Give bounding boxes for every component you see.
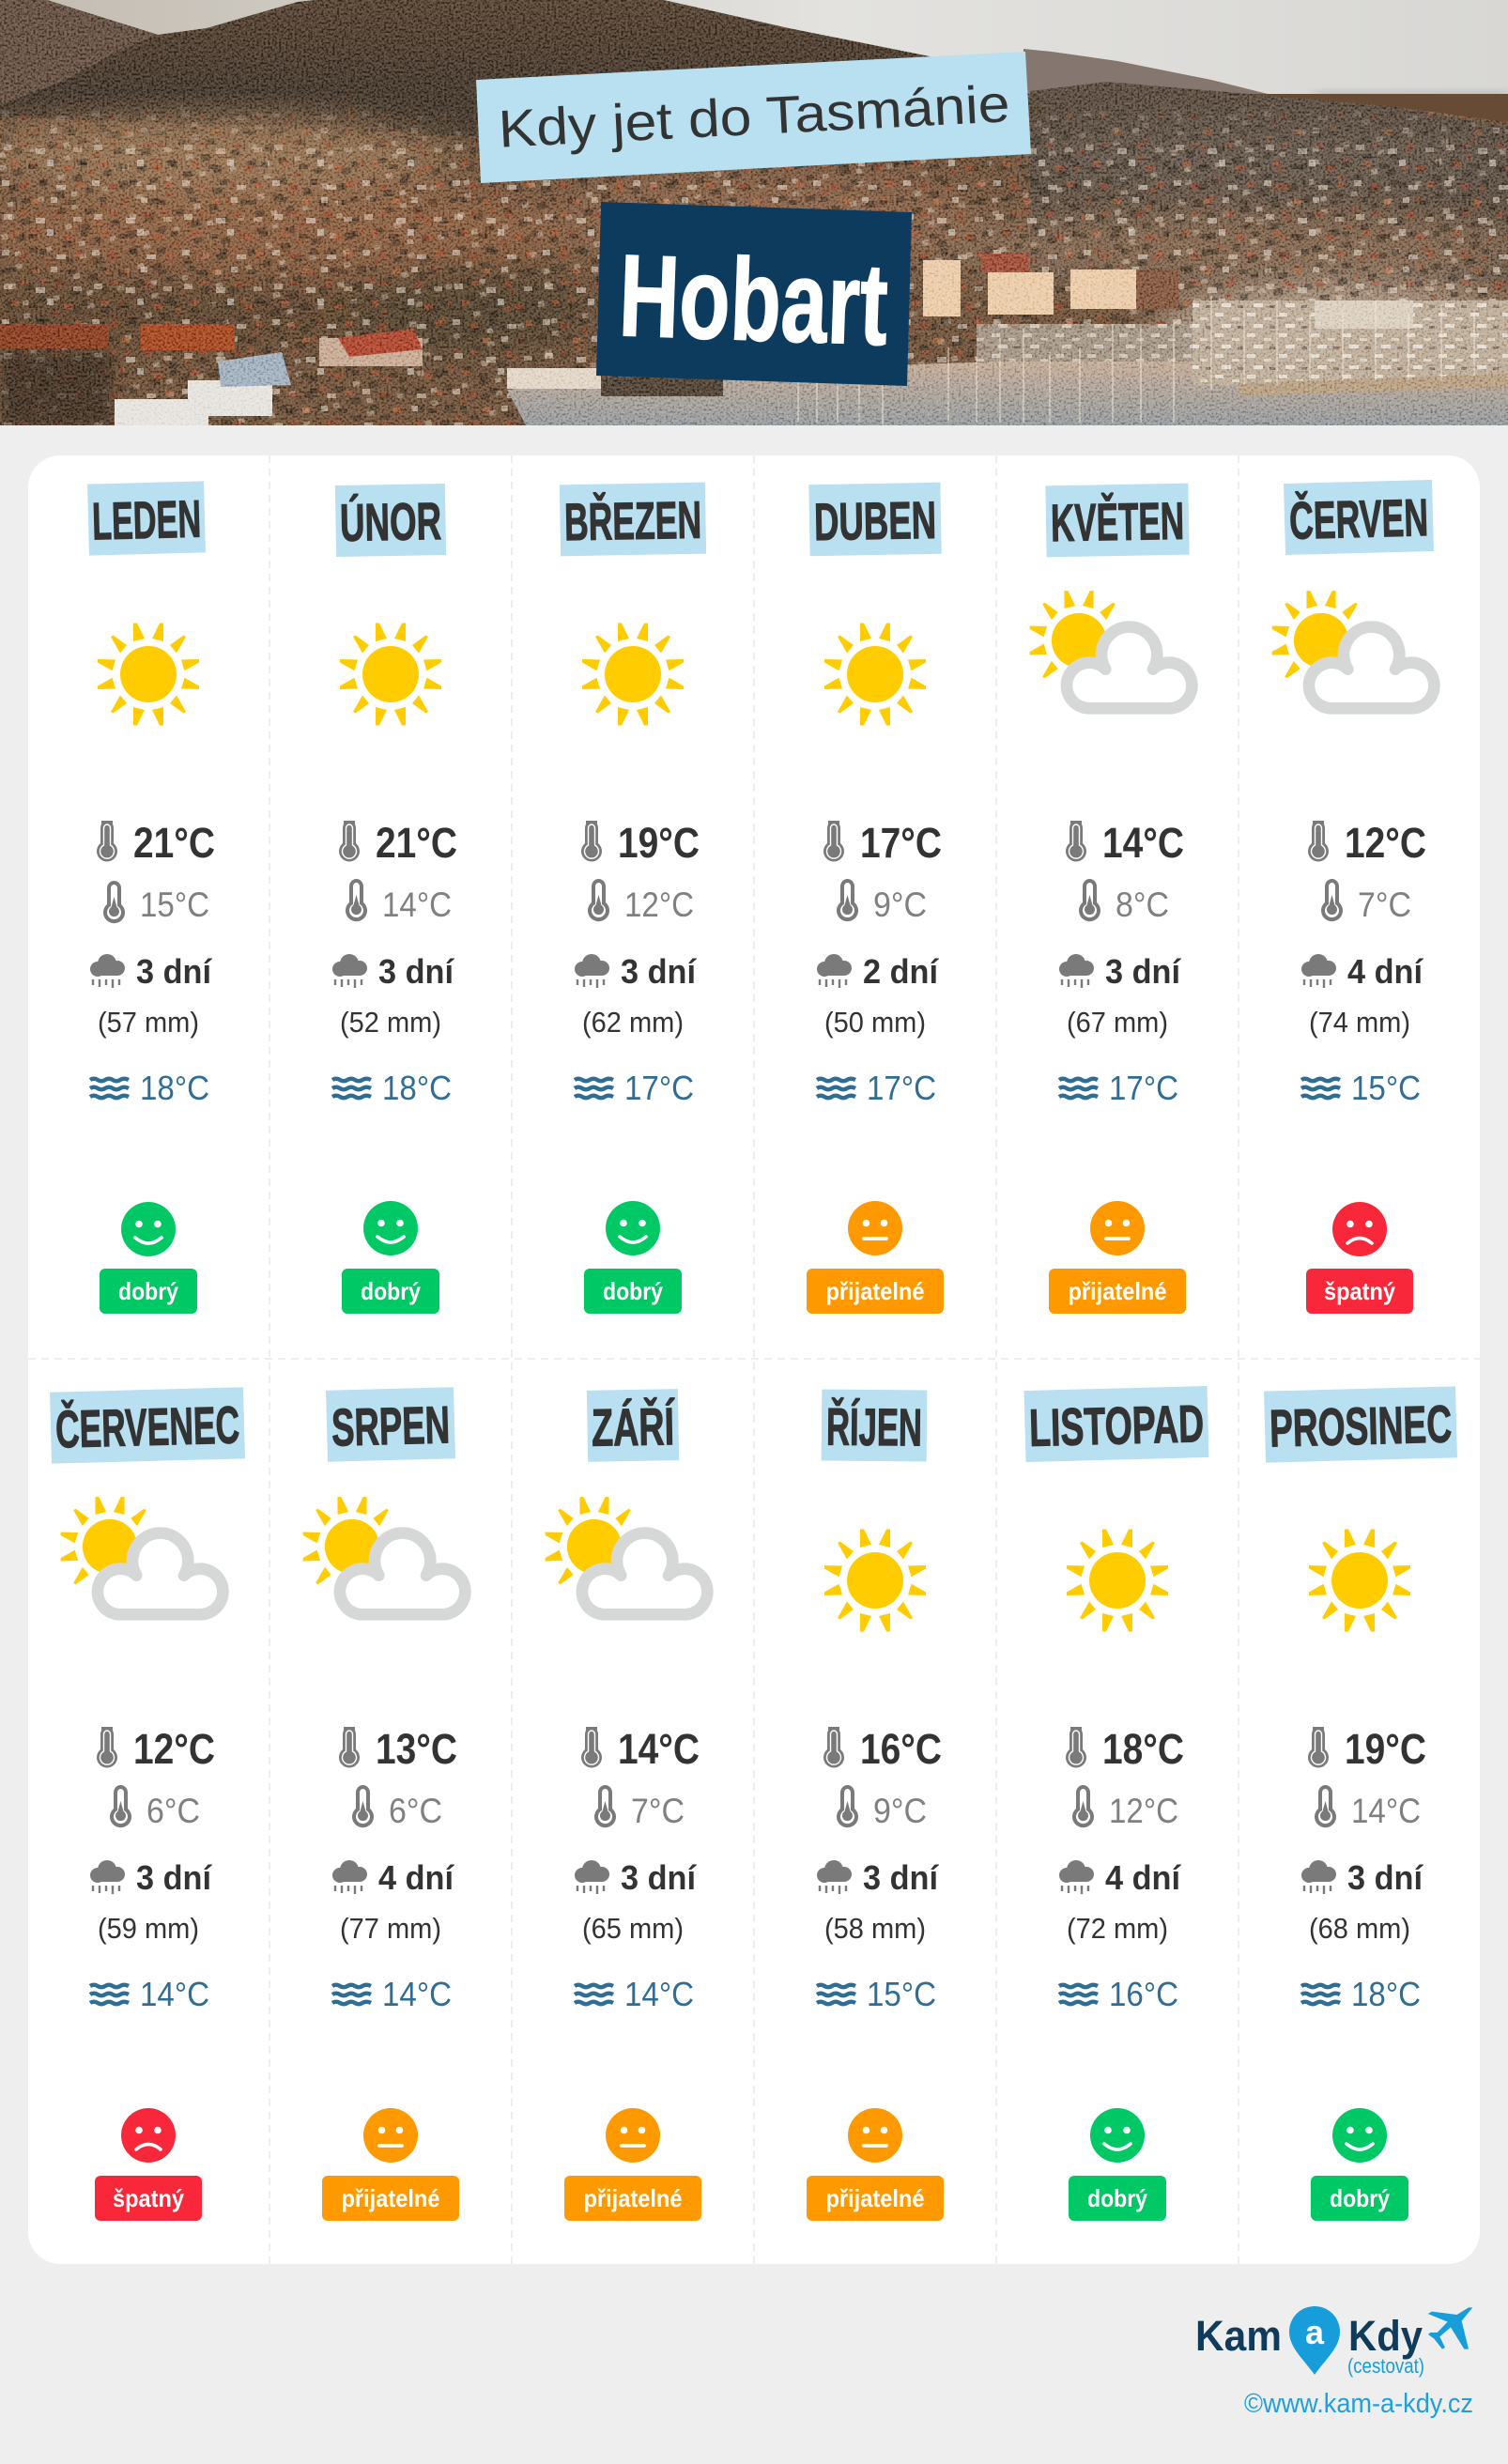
month label: ČERVEN	[1288, 487, 1429, 550]
rain days	[90, 952, 212, 991]
month label: ŘÍJEN	[826, 1397, 922, 1456]
low temperature	[837, 879, 927, 924]
column: Říjen	[807, 1390, 944, 2221]
verdict: přijatelné	[584, 2184, 682, 2212]
sea temperature	[575, 1975, 694, 2013]
high temperature: 21°C	[376, 819, 457, 867]
icon: sad smiley	[1332, 1202, 1387, 1256]
high temperature	[581, 819, 700, 867]
icon: neutral smiley	[848, 2108, 902, 2163]
month label: BŘEZEN	[563, 490, 702, 551]
rain days: 3 dní	[136, 952, 212, 991]
rainfall: (67 mm)	[1067, 1006, 1168, 1039]
rain days: 3 dní	[1347, 1858, 1423, 1897]
month label	[1264, 1386, 1457, 1463]
verdict: dobrý	[603, 1277, 663, 1305]
icon: good smiley	[121, 1202, 176, 1256]
month label	[335, 484, 446, 557]
rainfall: (57 mm)	[98, 1006, 199, 1039]
high temperature: 16°C	[860, 1725, 942, 1773]
month label	[808, 483, 942, 556]
rain days: 3 dní	[378, 952, 454, 991]
copyright link: ©www.kam-a-kdy.cz	[1244, 2389, 1473, 2419]
rain days	[1301, 1858, 1423, 1897]
icon: sun behind cloud	[546, 1497, 707, 1614]
verdict: dobrý	[1330, 2184, 1390, 2212]
sea temperature	[817, 1069, 936, 1107]
icon: sun	[824, 1529, 926, 1632]
rain days: 3 dní	[1105, 952, 1181, 991]
photo: Hobart harbour and town	[0, 0, 1508, 427]
month label: LEDEN	[91, 488, 202, 551]
verdict: přijatelné	[1069, 1277, 1166, 1305]
heading banner: Hobart: Hobart	[617, 231, 890, 370]
sea temperature: 18°C	[1351, 1975, 1421, 2013]
icon: sun	[340, 624, 441, 725]
month label	[822, 1390, 927, 1461]
high temperature: 14°C	[1102, 819, 1184, 867]
logo: Kam a Kdy: a	[1305, 2313, 1325, 2351]
sea temperature: 15°C	[867, 1975, 936, 2013]
icon: sun	[824, 624, 926, 725]
rain days: 3 dní	[136, 1858, 212, 1897]
column: Červenec	[50, 1387, 245, 2221]
low temperature: 14°C	[382, 886, 452, 924]
icon: sun	[98, 624, 199, 725]
icon: sun behind cloud	[1272, 591, 1434, 708]
high temperature	[823, 819, 942, 867]
icon: neutral smiley	[848, 1201, 902, 1255]
verdict: špatný	[113, 2184, 184, 2212]
rain days	[90, 1858, 212, 1897]
rain days	[575, 1858, 697, 1897]
verdict: přijatelné	[826, 1277, 924, 1305]
low temperature	[103, 881, 209, 924]
column: Květen	[1030, 484, 1192, 1314]
icon: neutral smiley	[1090, 1201, 1145, 1255]
icon: good smiley	[1090, 2108, 1145, 2163]
sea temperature: 17°C	[624, 1069, 694, 1107]
verdict	[1311, 2176, 1408, 2221]
month label: ZÁŘÍ	[591, 1396, 676, 1457]
low temperature	[1321, 879, 1411, 924]
logo: Kam a Kdy: Kdy	[1348, 2312, 1423, 2360]
column: Leden	[87, 481, 215, 1314]
month label	[326, 1387, 455, 1462]
verdict	[584, 1269, 682, 1314]
panel: months table	[28, 455, 1480, 2264]
low temperature	[1079, 879, 1169, 924]
rainfall: (74 mm)	[1309, 1006, 1410, 1039]
logo: Kam a Kdy	[1195, 2306, 1472, 2378]
low temperature	[837, 1785, 927, 1830]
month label	[1284, 480, 1434, 555]
column: Duben	[807, 483, 944, 1314]
verdict	[322, 2176, 459, 2221]
month label	[587, 1389, 679, 1462]
rainfall: (65 mm)	[582, 1912, 684, 1945]
heading banner: Hobart	[596, 202, 912, 386]
low temperature	[352, 1785, 442, 1830]
rain days: 3 dní	[863, 1858, 939, 1897]
month label	[87, 481, 206, 556]
column: Prosinec	[1264, 1386, 1457, 2221]
sea temperature: 18°C	[140, 1069, 209, 1107]
month label: KVĚTEN	[1050, 491, 1185, 552]
icon: map pin	[1289, 2306, 1340, 2375]
rain days	[332, 1858, 454, 1897]
rain days: 3 dní	[621, 1858, 697, 1897]
verdict: přijatelné	[826, 2184, 924, 2212]
low temperature	[588, 879, 694, 924]
icon: neutral smiley	[363, 2108, 418, 2163]
sea temperature: 16°C	[1109, 1975, 1178, 2013]
month label: LISTOPAD	[1028, 1394, 1205, 1457]
verdict: špatný	[1324, 1277, 1395, 1305]
rainfall: (52 mm)	[340, 1006, 441, 1039]
low temperature: 12°C	[624, 886, 694, 924]
title banner: Kdy jet do Tasmánie	[476, 52, 1031, 183]
rain days: 4 dní	[1347, 952, 1423, 991]
title banner: Kdy jet do Tasmánie: Kdy jet do Tasmánie	[497, 73, 1011, 159]
verdict	[564, 2176, 701, 2221]
sea temperature: 18°C	[382, 1069, 452, 1107]
high temperature	[339, 819, 457, 867]
sea temperature	[1059, 1975, 1178, 2013]
high temperature	[97, 1725, 215, 1773]
sea temperature	[1301, 1069, 1421, 1107]
sea temperature: 14°C	[624, 1975, 694, 2013]
icon: sun	[1067, 1529, 1168, 1632]
column: Listopad	[1024, 1386, 1208, 2221]
icon: good smiley	[606, 1201, 660, 1255]
rain days: 2 dní	[863, 952, 939, 991]
rainfall: (58 mm)	[824, 1912, 926, 1945]
high temperature: 17°C	[860, 819, 942, 867]
sea temperature: 17°C	[1109, 1069, 1178, 1107]
low temperature	[346, 879, 452, 924]
verdict	[807, 2176, 944, 2221]
month label: ÚNOR	[339, 491, 442, 552]
high temperature: 12°C	[1345, 819, 1426, 867]
logo: Kam a Kdy: (cestovat)	[1347, 2354, 1424, 2378]
sea temperature	[1059, 1069, 1178, 1107]
low temperature: 9°C	[873, 886, 927, 924]
sea temperature: 14°C	[382, 1975, 452, 2013]
sea temperature: 15°C	[1351, 1069, 1421, 1107]
high temperature: 12°C	[133, 1725, 215, 1773]
high temperature: 18°C	[1102, 1725, 1184, 1773]
sea temperature	[90, 1975, 209, 2013]
rain days	[817, 1858, 939, 1897]
icon: sun behind cloud	[61, 1497, 223, 1614]
month label	[1024, 1386, 1208, 1462]
icon: good smiley	[1332, 2108, 1387, 2163]
month label	[1045, 484, 1190, 557]
low temperature	[1072, 1785, 1178, 1830]
high temperature	[339, 1725, 457, 1773]
verdict: dobrý	[361, 1277, 421, 1305]
rainfall: (50 mm)	[824, 1006, 926, 1039]
icon: sun	[1309, 1529, 1410, 1632]
rainfall: (72 mm)	[1067, 1912, 1168, 1945]
column: Září	[546, 1389, 707, 2221]
icon: neutral smiley	[606, 2108, 660, 2163]
column: Únor	[332, 484, 457, 1314]
rain days	[1059, 952, 1181, 991]
high temperature: 13°C	[376, 1725, 457, 1773]
month label	[560, 483, 706, 556]
icon: sun behind cloud	[1030, 591, 1192, 708]
low temperature: 6°C	[389, 1792, 442, 1830]
verdict: dobrý	[118, 1277, 178, 1305]
verdict: dobrý	[1087, 2184, 1147, 2212]
sea temperature	[1301, 1975, 1421, 2013]
rainfall: (68 mm)	[1309, 1912, 1410, 1945]
high temperature: 21°C	[133, 819, 215, 867]
rain days: 3 dní	[621, 952, 697, 991]
icon: plane	[1428, 2307, 1472, 2349]
verdict	[807, 1269, 944, 1314]
low temperature	[110, 1785, 200, 1830]
high temperature: 19°C	[618, 819, 700, 867]
high temperature	[97, 819, 215, 867]
low temperature: 15°C	[140, 886, 209, 924]
sea temperature	[332, 1069, 452, 1107]
high temperature: 19°C	[1345, 1725, 1426, 1773]
month label	[50, 1387, 245, 1464]
column: Srpen	[303, 1387, 465, 2221]
low temperature: 14°C	[1351, 1792, 1421, 1830]
low temperature	[594, 1785, 685, 1830]
high temperature	[581, 1725, 700, 1773]
high temperature: 14°C	[618, 1725, 700, 1773]
rain days	[817, 952, 939, 991]
verdict: přijatelné	[342, 2184, 439, 2212]
sea temperature	[817, 1975, 936, 2013]
logo: Kam a Kdy: Kam	[1195, 2312, 1282, 2360]
column: Březen	[560, 483, 706, 1314]
verdict	[1049, 1269, 1186, 1314]
low temperature	[1315, 1785, 1421, 1830]
rain days	[1059, 1858, 1181, 1897]
verdict	[1069, 2176, 1166, 2221]
rainfall: (62 mm)	[582, 1006, 684, 1039]
sea temperature	[90, 1069, 209, 1107]
sea temperature: 17°C	[867, 1069, 936, 1107]
sea temperature	[332, 1975, 452, 2013]
high temperature	[1066, 819, 1184, 867]
rain days	[1301, 952, 1423, 991]
month label: DUBEN	[813, 490, 937, 551]
month label: SRPEN	[331, 1394, 451, 1457]
high temperature	[1066, 1725, 1184, 1773]
rainfall: (77 mm)	[340, 1912, 441, 1945]
rain days: 4 dní	[1105, 1858, 1181, 1897]
rainfall: (59 mm)	[98, 1912, 199, 1945]
high temperature	[823, 1725, 942, 1773]
sea temperature	[575, 1069, 694, 1107]
rain days	[332, 952, 454, 991]
verdict	[1306, 1269, 1413, 1314]
sea temperature: 14°C	[140, 1975, 209, 2013]
low temperature: 7°C	[631, 1792, 685, 1830]
icon: sun behind cloud	[303, 1497, 465, 1614]
low temperature: 8°C	[1116, 886, 1169, 924]
rain days: 4 dní	[378, 1858, 454, 1897]
low temperature: 9°C	[873, 1792, 927, 1830]
icon: sad smiley	[121, 2108, 176, 2163]
rain days	[575, 952, 697, 991]
high temperature	[1308, 1725, 1426, 1773]
verdict	[342, 1269, 439, 1314]
icon: sun	[582, 624, 684, 725]
verdict	[100, 1269, 197, 1314]
verdict	[95, 2176, 202, 2221]
month label: ČERVENEC	[54, 1394, 240, 1459]
low temperature: 12°C	[1109, 1792, 1178, 1830]
low temperature: 7°C	[1358, 886, 1411, 924]
high temperature	[1308, 819, 1426, 867]
icon: good smiley	[363, 1201, 418, 1255]
low temperature: 6°C	[146, 1792, 200, 1830]
column: Červen	[1272, 480, 1434, 1314]
